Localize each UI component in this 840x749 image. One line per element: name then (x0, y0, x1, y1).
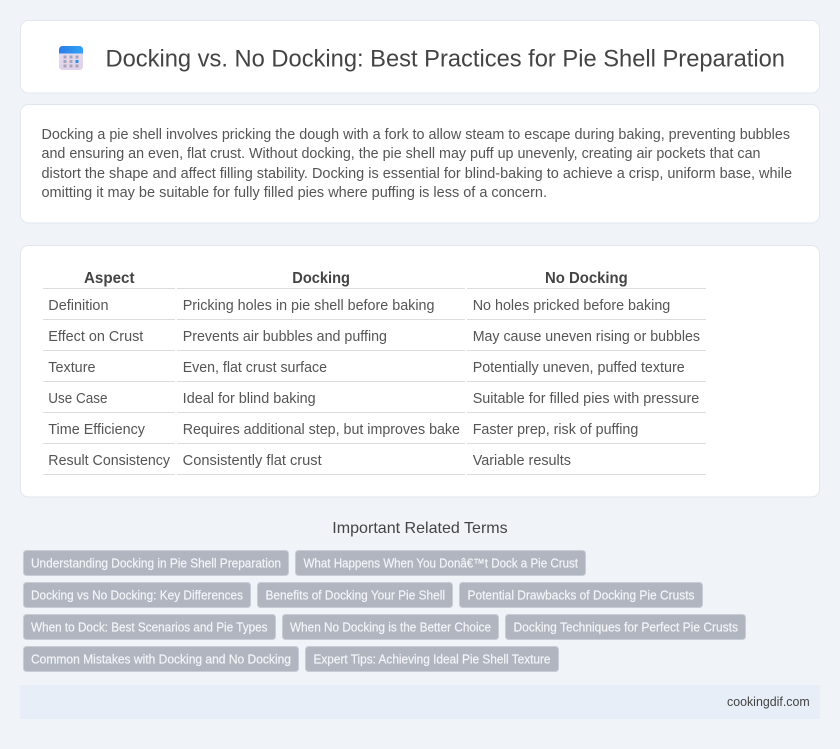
tag (506, 614, 746, 640)
row: Time Efficiency: Time Efficiency (48, 422, 146, 438)
row: Texture (48, 360, 685, 376)
row: Time Efficiency (48, 422, 638, 438)
title: Docking vs. No Docking: Best Practices for Pie Shell Preparation (106, 46, 785, 72)
tag: Understanding Docking in Pie Shell Preparation (31, 556, 281, 570)
related term tags (24, 550, 746, 672)
row: Result Consistency: Variable results (473, 453, 571, 469)
row: Definition: No holes pricked before baking (473, 298, 670, 314)
tag (24, 646, 298, 672)
panel: introduction text (20, 104, 820, 223)
footer bar (20, 685, 820, 719)
row: Texture: Texture (48, 360, 96, 376)
row: Effect on Crust: Prevents air bubbles and puffing (183, 329, 387, 345)
row: Texture: Potentially uneven, puffed texture (473, 360, 685, 376)
row: Use Case (48, 391, 699, 407)
text block: description: omitting it may be suitable for fully filled pies where puffing is less of a concern. (42, 185, 547, 201)
row: Definition: Pricking holes in pie shell before baking (183, 298, 434, 314)
text block: description: Docking a pie shell involves pricking the dough with a fork to allow steam to escape during baking, preventing bubbles (42, 127, 790, 143)
tag (306, 646, 558, 672)
tag: What Happens When You Donâ€™t Dock a Pie Crust (304, 556, 578, 570)
tag: Common Mistakes with Docking and No Docking (31, 652, 291, 666)
tag: Benefits of Docking Your Pie Shell (266, 588, 445, 602)
row: Use Case: Ideal for blind baking (183, 391, 316, 407)
tag (24, 614, 276, 640)
row: Use Case: Suitable for filled pies with pressure (473, 391, 699, 407)
row: Effect on Crust (48, 329, 700, 345)
row: Result Consistency (48, 453, 571, 469)
table header row: Aspect (84, 270, 135, 287)
panel: title header (20, 20, 820, 93)
text block: description: distort the shape and affect filling stability. Docking is essential for blind-baking to achieve a crisp, uniform base, while (42, 166, 792, 182)
tag: When to Dock: Best Scenarios and Pie Types (31, 620, 268, 634)
tag (24, 582, 250, 608)
tag (296, 550, 586, 576)
table header row (84, 270, 628, 287)
tag (24, 550, 288, 576)
panel: comparison table (20, 246, 820, 497)
row: Definition: Definition (48, 298, 108, 314)
icon: calendar (59, 46, 83, 70)
row: Time Efficiency: Requires additional step, but improves bake (183, 422, 460, 438)
row: Result Consistency: Consistently flat crust (183, 453, 322, 469)
row: Effect on Crust: May cause uneven rising or bubbles (473, 329, 700, 345)
tag (258, 582, 452, 608)
tag: Docking vs No Docking: Key Differences (31, 588, 243, 602)
tag: Docking Techniques for Perfect Pie Crusts (514, 620, 738, 634)
tag (282, 614, 498, 640)
text block: description: and ensuring an even, flat crust. Without docking, the pie shell may puff up unevenly, creating air pockets that can (42, 146, 760, 162)
row: Result Consistency: Result Consistency (48, 453, 171, 469)
tag: Expert Tips: Achieving Ideal Pie Shell Texture (314, 652, 551, 666)
row: Use Case: Use Case (48, 391, 108, 407)
row: Effect on Crust: Effect on Crust (48, 329, 143, 345)
table header row: Docking (292, 270, 350, 287)
table header row: No Docking (545, 270, 628, 287)
row: Texture: Even, flat crust surface (183, 360, 327, 376)
row: Time Efficiency: Faster prep, risk of puffing (473, 422, 638, 438)
tag (460, 582, 702, 608)
tag: Potential Drawbacks of Docking Pie Crusts (468, 588, 694, 602)
heading: related terms: Important Related Terms (332, 520, 508, 537)
tag: When No Docking is the Better Choice (290, 620, 491, 634)
row: Definition (48, 298, 670, 314)
footer source text: cookingdif.com (727, 694, 810, 709)
text block: description (42, 127, 792, 201)
